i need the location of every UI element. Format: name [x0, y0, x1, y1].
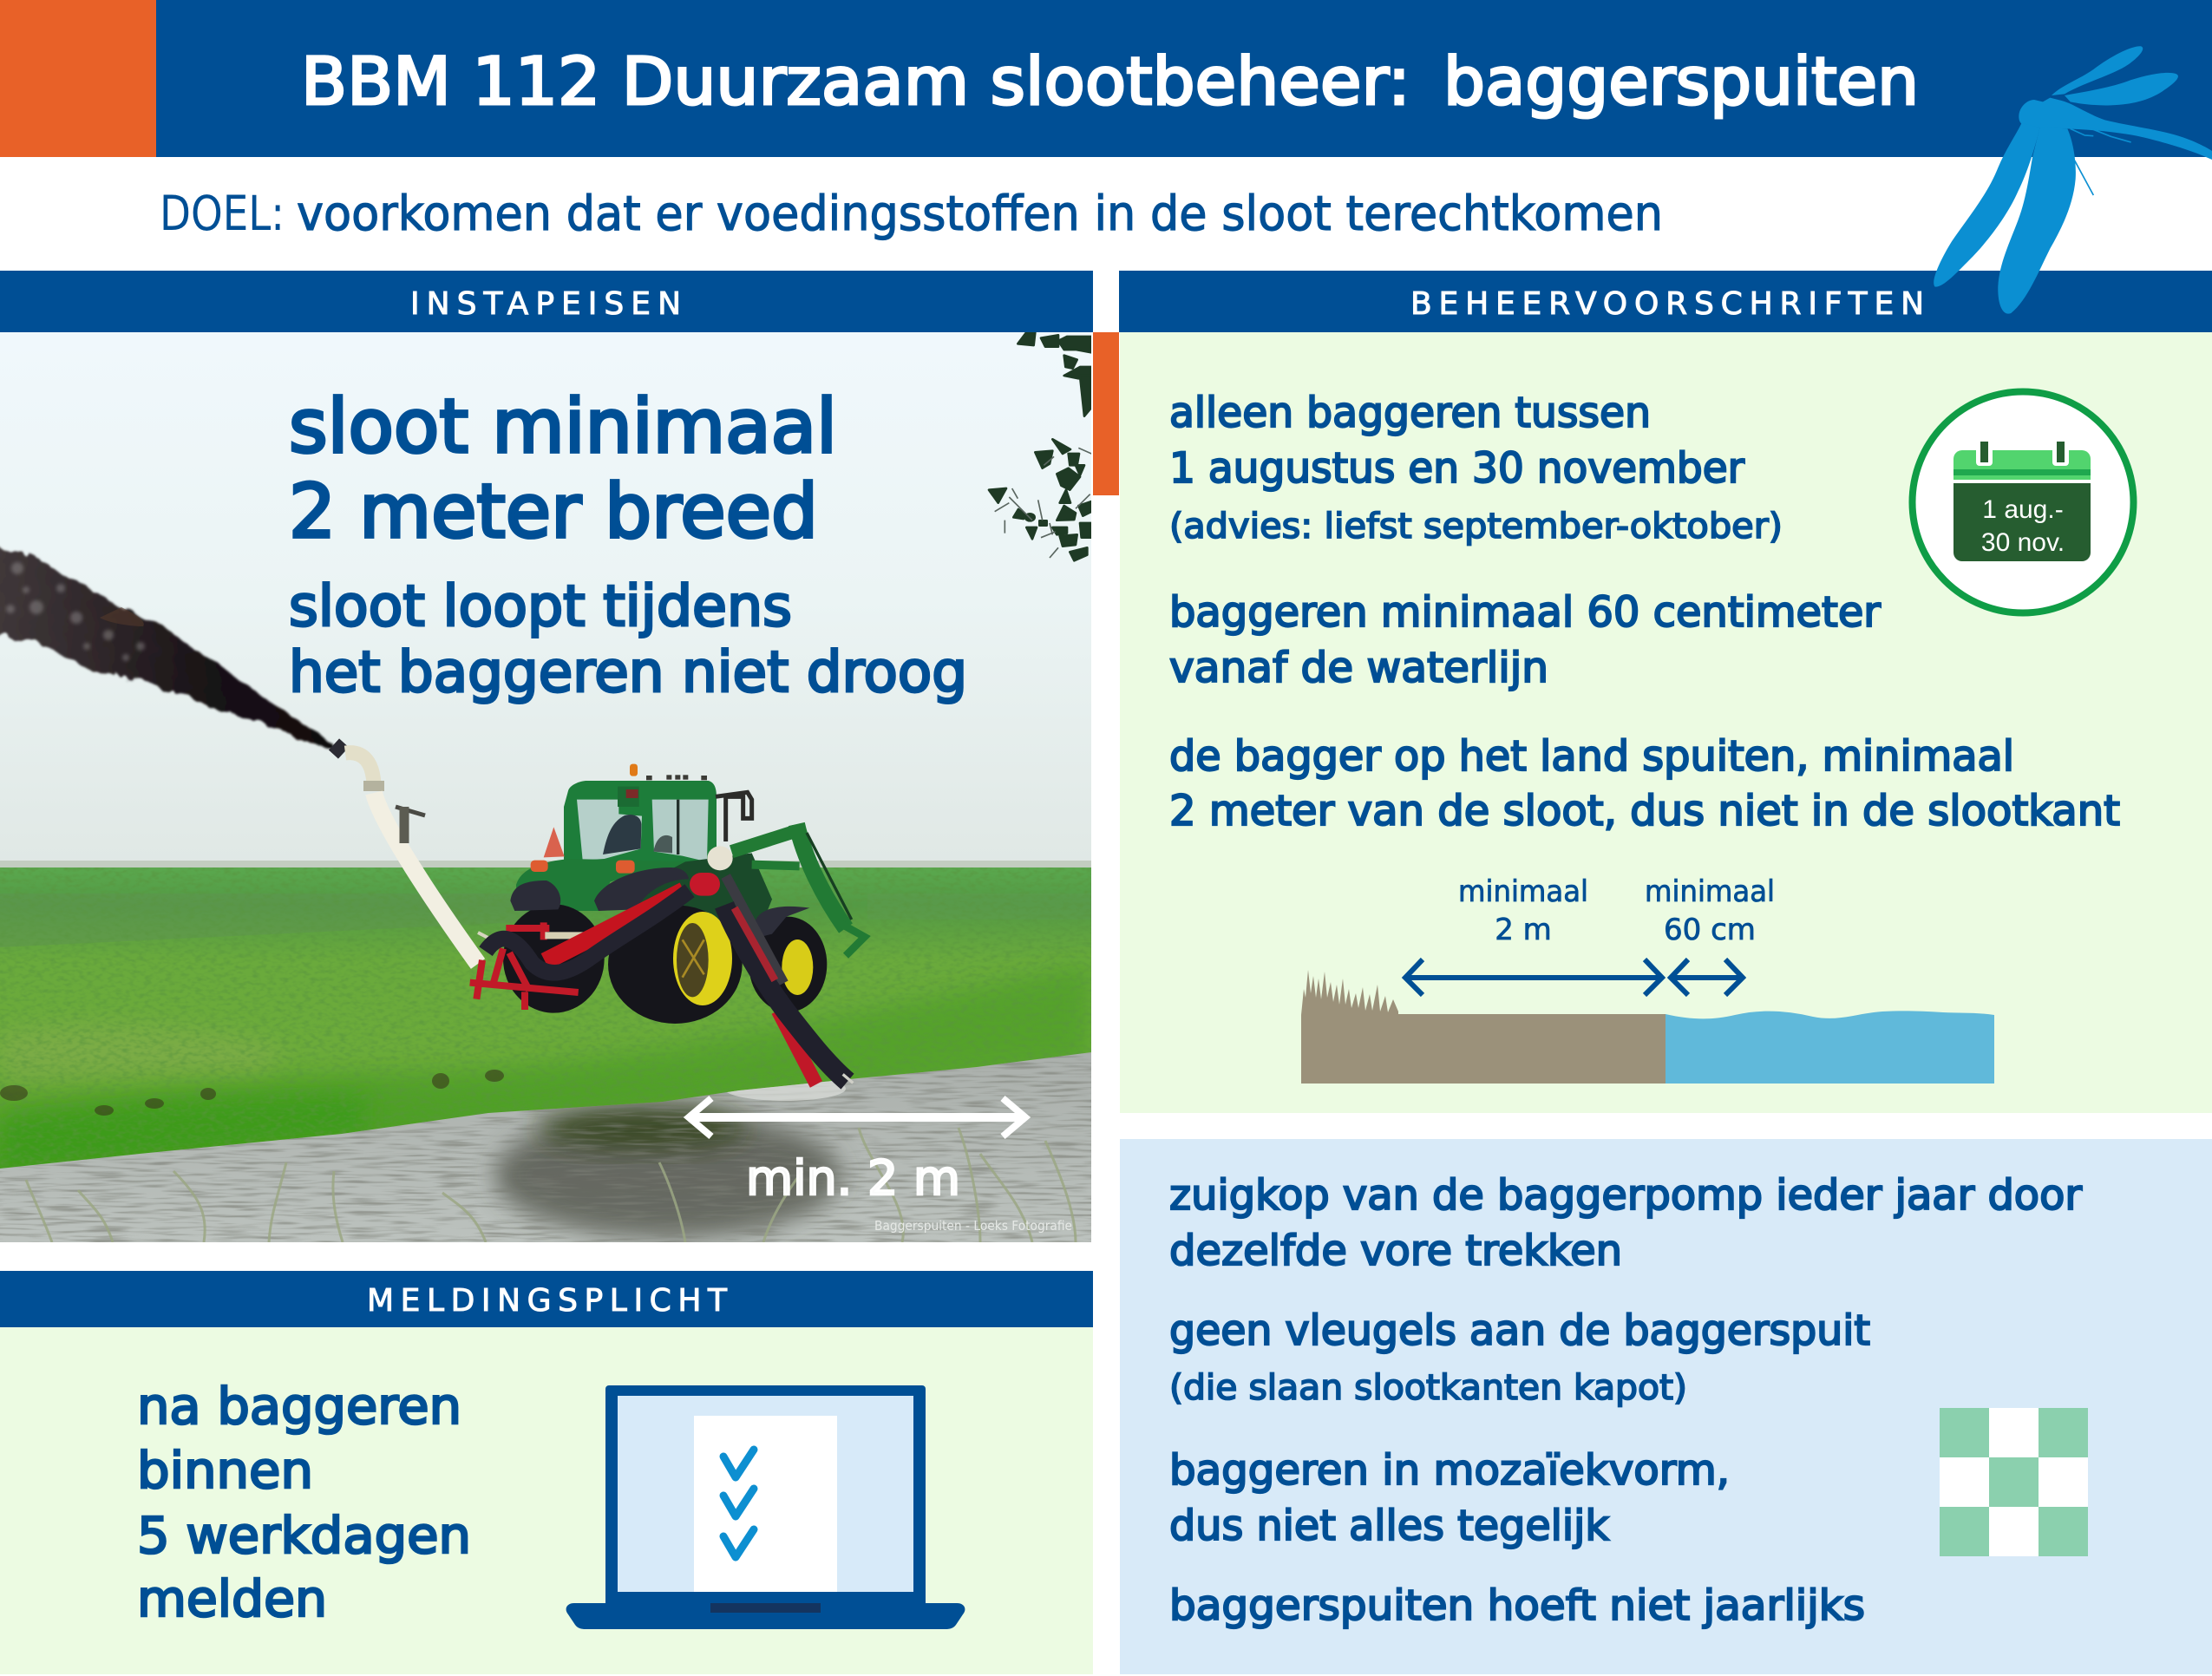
far wheel — [503, 904, 605, 1013]
goal statement: voorkomen dat er voedingsstoffen in de sloot terechtkomen — [297, 186, 1663, 241]
text: reporting duty: na baggeren — [137, 1377, 461, 1436]
icon: mosaic pattern — [1940, 1408, 2088, 1556]
ditch water — [0, 1041, 1091, 1242]
text: distance from waterline: vanaf de waterlijn — [1169, 644, 1548, 692]
front wheel — [749, 917, 827, 1012]
photo subheading: water requirement — [289, 574, 967, 705]
heading bar: meldingsplicht — [0, 1271, 1093, 1327]
icon: dragonfly — [1934, 46, 2212, 314]
icon: laptop with checklist — [566, 1385, 965, 1629]
dredge plume — [0, 544, 337, 751]
foreground reeds — [26, 1128, 1076, 1242]
text: distance from waterline: baggeren minimaal 60 centimeter — [1169, 588, 1881, 637]
goal statement: DOEL: — [160, 186, 285, 241]
text: reporting duty — [137, 1377, 471, 1628]
heading bar: beheervoorschriften: BEHEERVOORSCHRIFTEN — [1410, 286, 1924, 322]
diagram labels: 60 cm — [1664, 913, 1756, 947]
arrows: distances — [1405, 959, 1743, 995]
panel: meldingsplicht green — [0, 1327, 1093, 1674]
horizon haze and grass field — [0, 861, 1091, 1180]
photo heading: width requirement — [289, 383, 837, 555]
spray boom — [334, 744, 503, 964]
text: period — [1169, 389, 1783, 547]
text: spray on land: de bagger op het land spuiten, minimaal — [1169, 732, 2014, 781]
diagram: land and water distances — [1301, 874, 1994, 1084]
engine block — [640, 853, 772, 920]
rear wheel — [608, 905, 743, 1024]
text: no wings — [1169, 1306, 1870, 1408]
tractor — [503, 764, 865, 1024]
text: spray on land — [1169, 732, 2120, 835]
text: period: 1 augustus en 30 november — [1169, 444, 1744, 493]
text: period: alleen baggeren tussen — [1169, 389, 1651, 437]
heading bar: beheervoorschriften — [1119, 271, 2212, 332]
heading bar: instapeisen: INSTAPEISEN — [410, 286, 681, 322]
text: reporting duty: binnen — [137, 1441, 313, 1500]
tree leaves — [989, 332, 1091, 560]
loader arm — [731, 824, 865, 956]
title — [301, 43, 1919, 120]
icon: calendar in circle: 30 nov. — [1981, 528, 2065, 557]
text: mosaic: dus niet alles tegelijk — [1169, 1502, 1609, 1550]
text: suction head — [1169, 1171, 2082, 1275]
warning triangle — [544, 827, 565, 857]
land with grass — [1301, 970, 1666, 1084]
icon: calendar in circle: 1 aug.- — [1982, 495, 2064, 524]
photo: tractor spraying dredge — [0, 332, 1091, 1242]
orange accent strip — [1093, 332, 1119, 495]
photo heading: width requirement: sloot minimaal — [289, 383, 837, 470]
text: distance from waterline — [1169, 588, 1881, 692]
panel: beheervoorschriften green — [1120, 332, 2212, 1113]
mirror arm — [716, 792, 752, 841]
diagram labels: minimaal — [1458, 874, 1588, 909]
label: minimum 2 m: min. 2 m — [746, 1150, 960, 1206]
text: period: (advies: liefst september-oktober) — [1169, 507, 1783, 547]
text: no wings: geen vleugels aan de baggerspuit — [1169, 1306, 1870, 1355]
text: reporting duty: melden — [137, 1569, 327, 1628]
text: no wings: (die slaan slootkanten kapot) — [1169, 1368, 1687, 1408]
text: suction head: zuigkop van de baggerpomp ieder jaar door — [1169, 1171, 2082, 1220]
photo subheading: water requirement: het baggeren niet droog — [289, 640, 967, 705]
title: baggerspuiten — [1443, 43, 1919, 120]
diagram labels: 2 m — [1495, 913, 1552, 947]
right fender — [594, 867, 689, 911]
credit: Baggerspuiten - Loeks Fotografie — [874, 1218, 1072, 1234]
text: mosaic — [1169, 1446, 1730, 1550]
photo subheading: water requirement: sloot loopt tijdens — [289, 574, 792, 639]
text: not annual: baggerspuiten hoeft niet jaarlijks — [1169, 1581, 1865, 1630]
panel: extra rules blue — [1120, 1139, 2212, 1674]
water with waves — [1666, 1011, 1994, 1084]
diagram labels — [1458, 874, 1775, 947]
text: mosaic: baggeren in mozaïekvorm, — [1169, 1446, 1730, 1495]
text: suction head: dezelfde vore trekken — [1169, 1227, 1622, 1275]
heading bar: instapeisen — [0, 271, 1093, 332]
cab — [630, 764, 638, 776]
body — [516, 859, 696, 911]
diagram labels: minimaal — [1645, 874, 1775, 909]
text: reporting duty: 5 werkdagen — [137, 1506, 471, 1565]
icon: calendar in circle — [1912, 392, 2134, 612]
heading bar: meldingsplicht: MELDINGSPLICHT — [367, 1283, 728, 1319]
photo heading: width requirement: 2 meter breed — [289, 468, 818, 555]
pump frame and hoses — [470, 846, 853, 1084]
text: spray on land: 2 meter van de sloot, dus niet in de slootkant — [1169, 787, 2120, 835]
arrow: ditch width — [689, 1098, 1025, 1136]
header band — [0, 0, 2212, 157]
title: BBM 112 Duurzaam slootbeheer: — [301, 43, 1410, 120]
